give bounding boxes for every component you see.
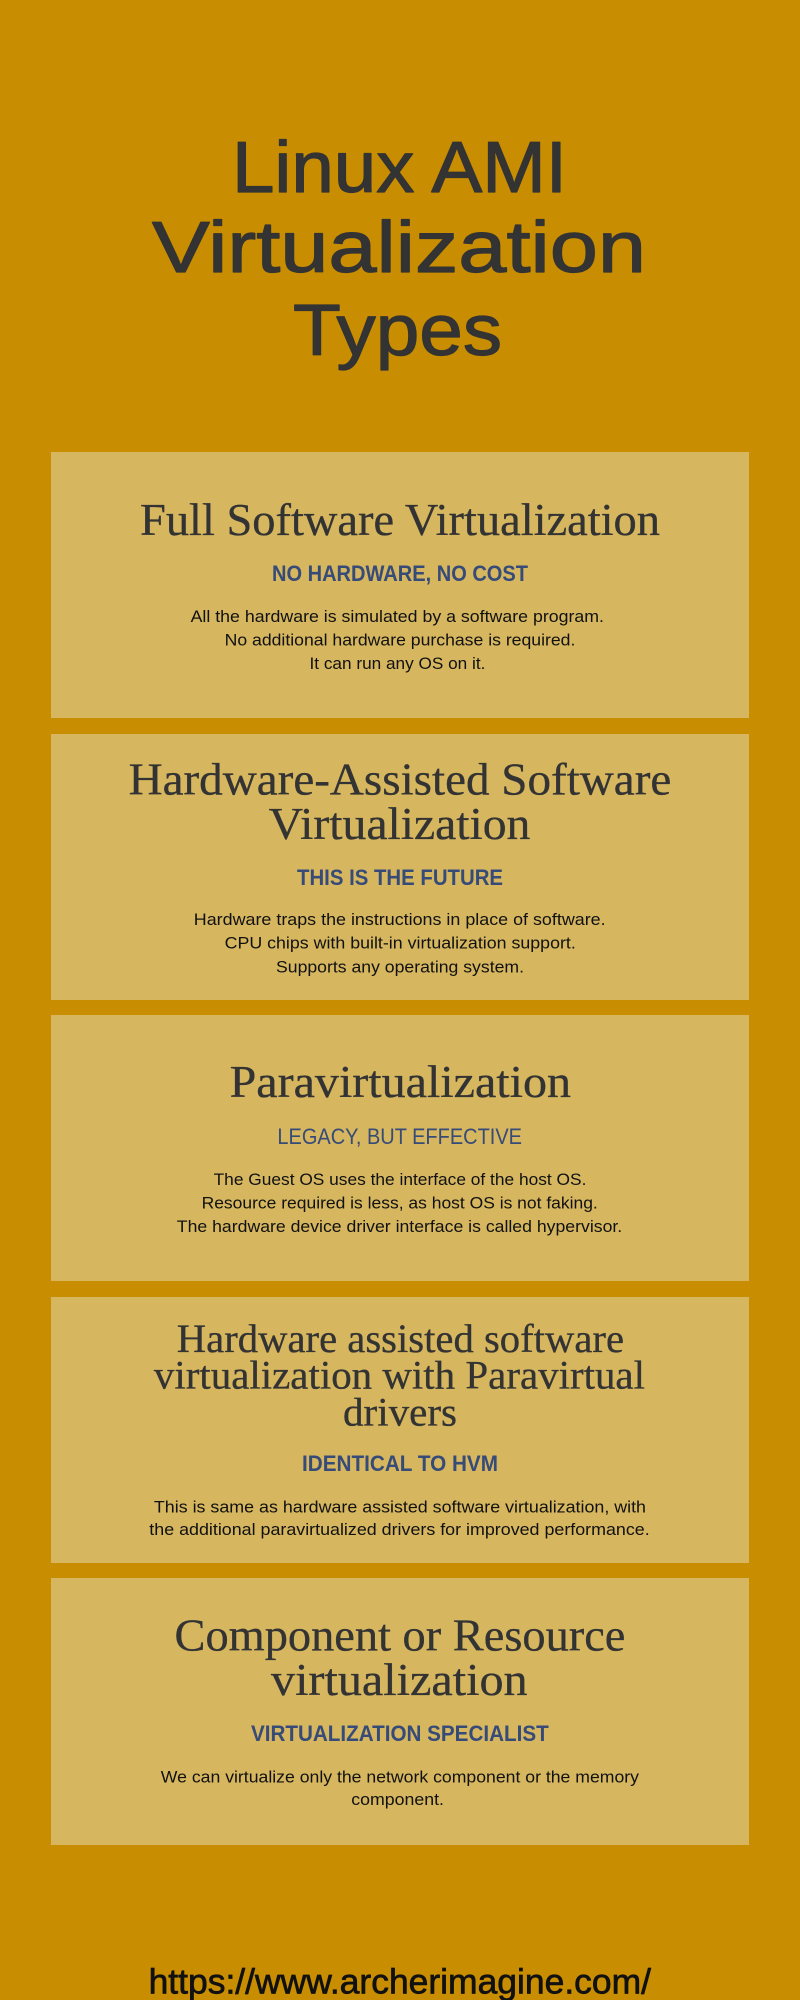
panel: Component or Resource virtualization <box>51 1578 749 1845</box>
heading: Virtualization <box>269 799 530 849</box>
heading: drivers <box>343 1390 457 1434</box>
title: Virtualization <box>152 208 646 288</box>
body text: Supports any operating system. <box>276 957 524 976</box>
subheading: IDENTICAL TO HVM <box>302 1451 498 1476</box>
body text: the additional paravirtualized drivers for improved performance. <box>149 1520 650 1539</box>
panel: Paravirtualization <box>51 1015 749 1281</box>
subheading: VIRTUALIZATION SPECIALIST <box>251 1721 549 1746</box>
heading: virtualization <box>271 1655 528 1705</box>
body text: We can virtualize only the network component or the memory <box>161 1767 640 1786</box>
panel: Hardware assisted software virtualization with Paravirtual drivers <box>51 1297 749 1563</box>
heading: Component or Resource <box>174 1610 625 1660</box>
title: Types <box>293 291 502 371</box>
body text <box>194 910 606 976</box>
body text: The hardware device driver interface is called hypervisor. <box>177 1217 622 1236</box>
body text <box>161 1767 640 1809</box>
body text: No additional hardware purchase is required. <box>225 631 575 650</box>
body text: CPU chips with built-in virtualization support. <box>225 933 576 952</box>
heading: Hardware assisted software <box>177 1316 624 1361</box>
body text: All the hardware is simulated by a software program. <box>191 607 604 626</box>
heading: Full Software Virtualization <box>140 495 660 545</box>
title: Linux AMI <box>232 128 567 208</box>
body text: It can run any OS on it. <box>310 654 485 673</box>
heading <box>129 754 671 849</box>
heading <box>174 1610 625 1705</box>
subheading: LEGACY, BUT EFFECTIVE <box>277 1124 522 1149</box>
heading: Hardware-Assisted Software <box>129 754 671 804</box>
heading: virtualization with Paravirtual <box>154 1352 645 1398</box>
body text: This is same as hardware assisted software virtualization, with <box>154 1497 646 1516</box>
body text: Resource required is less, as host OS is not faking. <box>202 1193 598 1212</box>
body text <box>191 607 604 673</box>
heading <box>154 1316 645 1434</box>
body text <box>177 1170 622 1236</box>
body text: component. <box>351 1790 444 1809</box>
subheading: THIS IS THE FUTURE <box>297 865 503 890</box>
body text: Hardware traps the instructions in place of software. <box>194 910 606 929</box>
panel: Full Software Virtualization <box>51 452 749 718</box>
heading: Paravirtualization <box>230 1057 571 1107</box>
panel: Hardware-Assisted Software Virtualization <box>51 734 749 1000</box>
body text: The Guest OS uses the interface of the host OS. <box>214 1170 586 1189</box>
subheading: NO HARDWARE, NO COST <box>272 561 528 586</box>
title <box>152 128 646 371</box>
body text <box>149 1497 650 1539</box>
